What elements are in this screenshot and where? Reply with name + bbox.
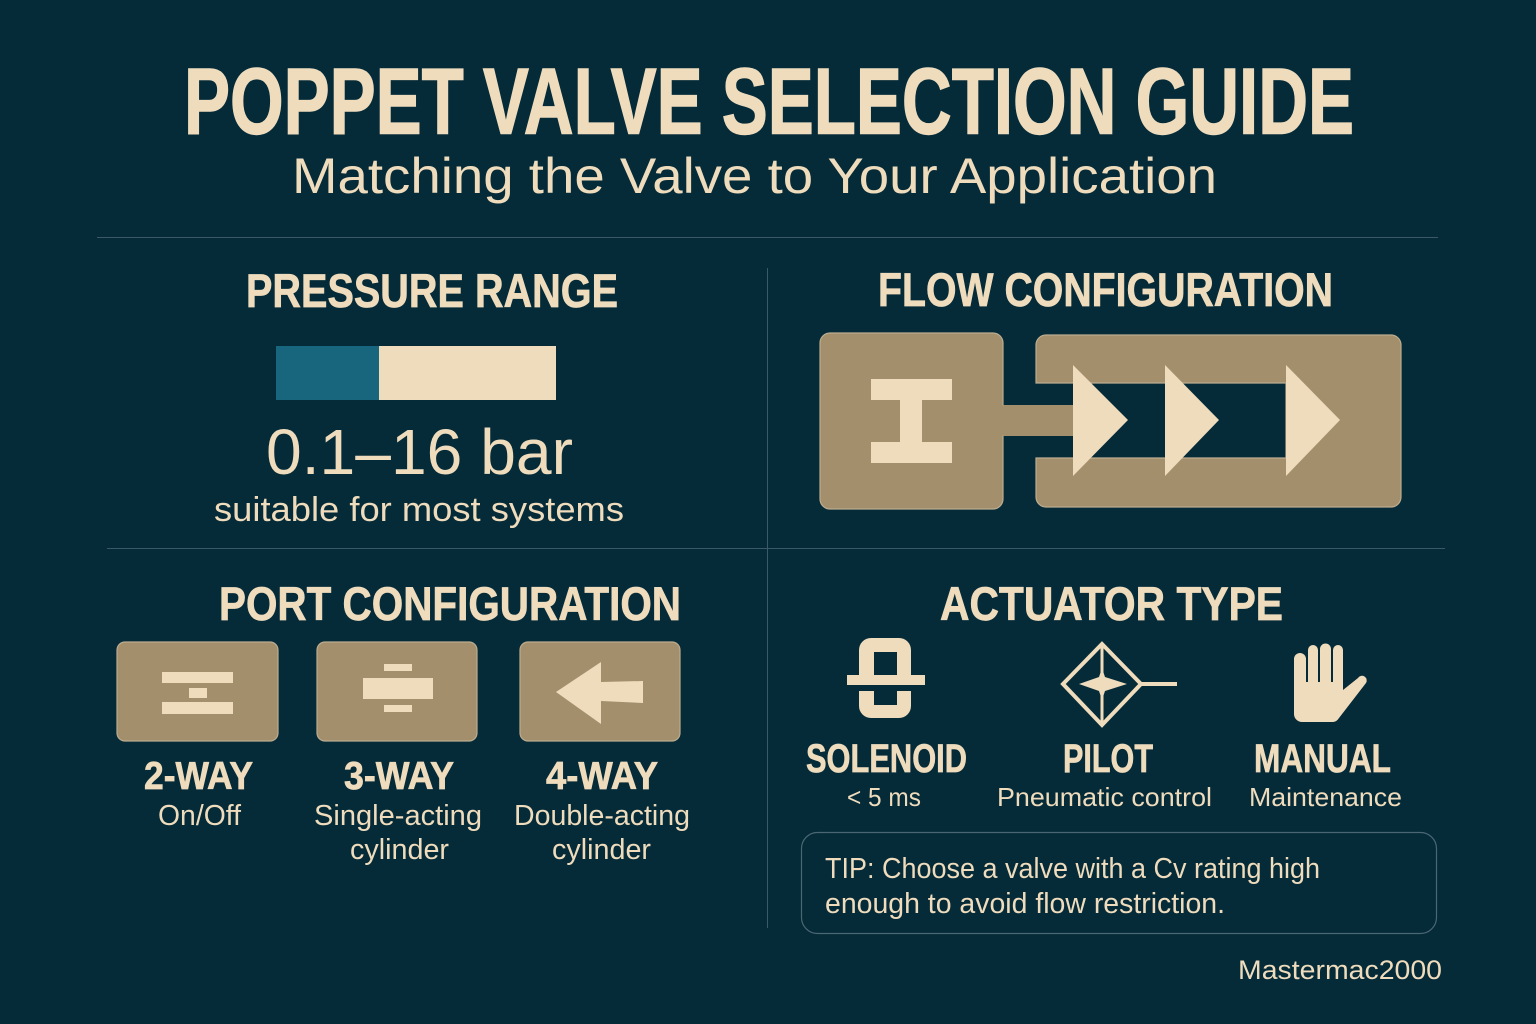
description: double-acting cylinder: cylinder bbox=[552, 834, 651, 866]
heading: flow configuration: FLOW CONFIGURATION bbox=[878, 263, 1333, 316]
panel: port configuration bbox=[117, 577, 690, 866]
description: single-acting cylinder bbox=[314, 800, 482, 866]
panel: actuator type bbox=[802, 577, 1436, 934]
label: solenoid: SOLENOID bbox=[806, 737, 967, 781]
icon: 3-way bbox=[363, 664, 433, 712]
description: pneumatic control: Pneumatic control bbox=[997, 782, 1212, 812]
arrow three bbox=[1286, 365, 1340, 476]
port option: 3-way bbox=[314, 642, 482, 866]
port option: 4-way bbox=[514, 642, 690, 866]
description: single-acting cylinder: Single-acting bbox=[314, 800, 482, 832]
label: 4-way: 4-WAY bbox=[546, 755, 658, 798]
label: pilot: PILOT bbox=[1063, 737, 1153, 781]
label: 2-way: 2-WAY bbox=[144, 755, 253, 798]
pressure note: suitable for most systems bbox=[214, 491, 624, 529]
description: maintenance: Maintenance bbox=[1249, 782, 1402, 812]
description: double-acting cylinder bbox=[514, 800, 690, 866]
actuator: solenoid bbox=[806, 638, 967, 812]
port option: 2-way bbox=[117, 642, 278, 832]
callout: tip: enough to avoid flow restriction. bbox=[825, 888, 1225, 920]
flow connector bbox=[1000, 405, 1075, 436]
heading: pressure range: PRESSURE RANGE bbox=[246, 264, 618, 317]
callout: tip: TIP: Choose a valve with a Cv rating high bbox=[825, 853, 1320, 885]
icon: hand bbox=[1294, 644, 1367, 722]
subtitle: Matching the Valve to Your Application bbox=[292, 148, 1217, 204]
valve body block bbox=[820, 333, 1003, 509]
description: double-acting cylinder: Double-acting bbox=[514, 800, 690, 832]
actuator: manual bbox=[1249, 644, 1402, 812]
callout: tip bbox=[802, 832, 1436, 934]
pressure range bar bbox=[276, 346, 556, 400]
flow channel block bbox=[1036, 335, 1401, 507]
heading: actuator type: ACTUATOR TYPE bbox=[940, 577, 1283, 630]
pressure value: 0.1–16 bar bbox=[266, 416, 573, 488]
arrow one bbox=[1073, 365, 1128, 476]
description: on/off: On/Off bbox=[158, 800, 242, 832]
heading: port configuration: PORT CONFIGURATION bbox=[219, 577, 681, 630]
icon: pilot valve bbox=[1063, 644, 1177, 725]
icon: solenoid bbox=[847, 638, 925, 718]
icon: I-beam bbox=[871, 379, 952, 463]
arrow two bbox=[1165, 365, 1219, 476]
label: manual: MANUAL bbox=[1254, 737, 1391, 781]
credit: Mastermac2000 bbox=[1238, 955, 1442, 985]
icon: left arrow bbox=[556, 662, 643, 724]
description: response time: < 5 ms bbox=[847, 782, 921, 812]
panel: flow configuration bbox=[820, 263, 1401, 509]
label: 3-way: 3-WAY bbox=[344, 755, 454, 798]
icon: 2-way bbox=[162, 672, 233, 714]
actuator: pilot bbox=[997, 644, 1212, 812]
flow diagram bbox=[820, 333, 1401, 509]
panel: pressure range bbox=[214, 264, 624, 529]
description: single-acting cylinder: cylinder bbox=[350, 834, 449, 866]
